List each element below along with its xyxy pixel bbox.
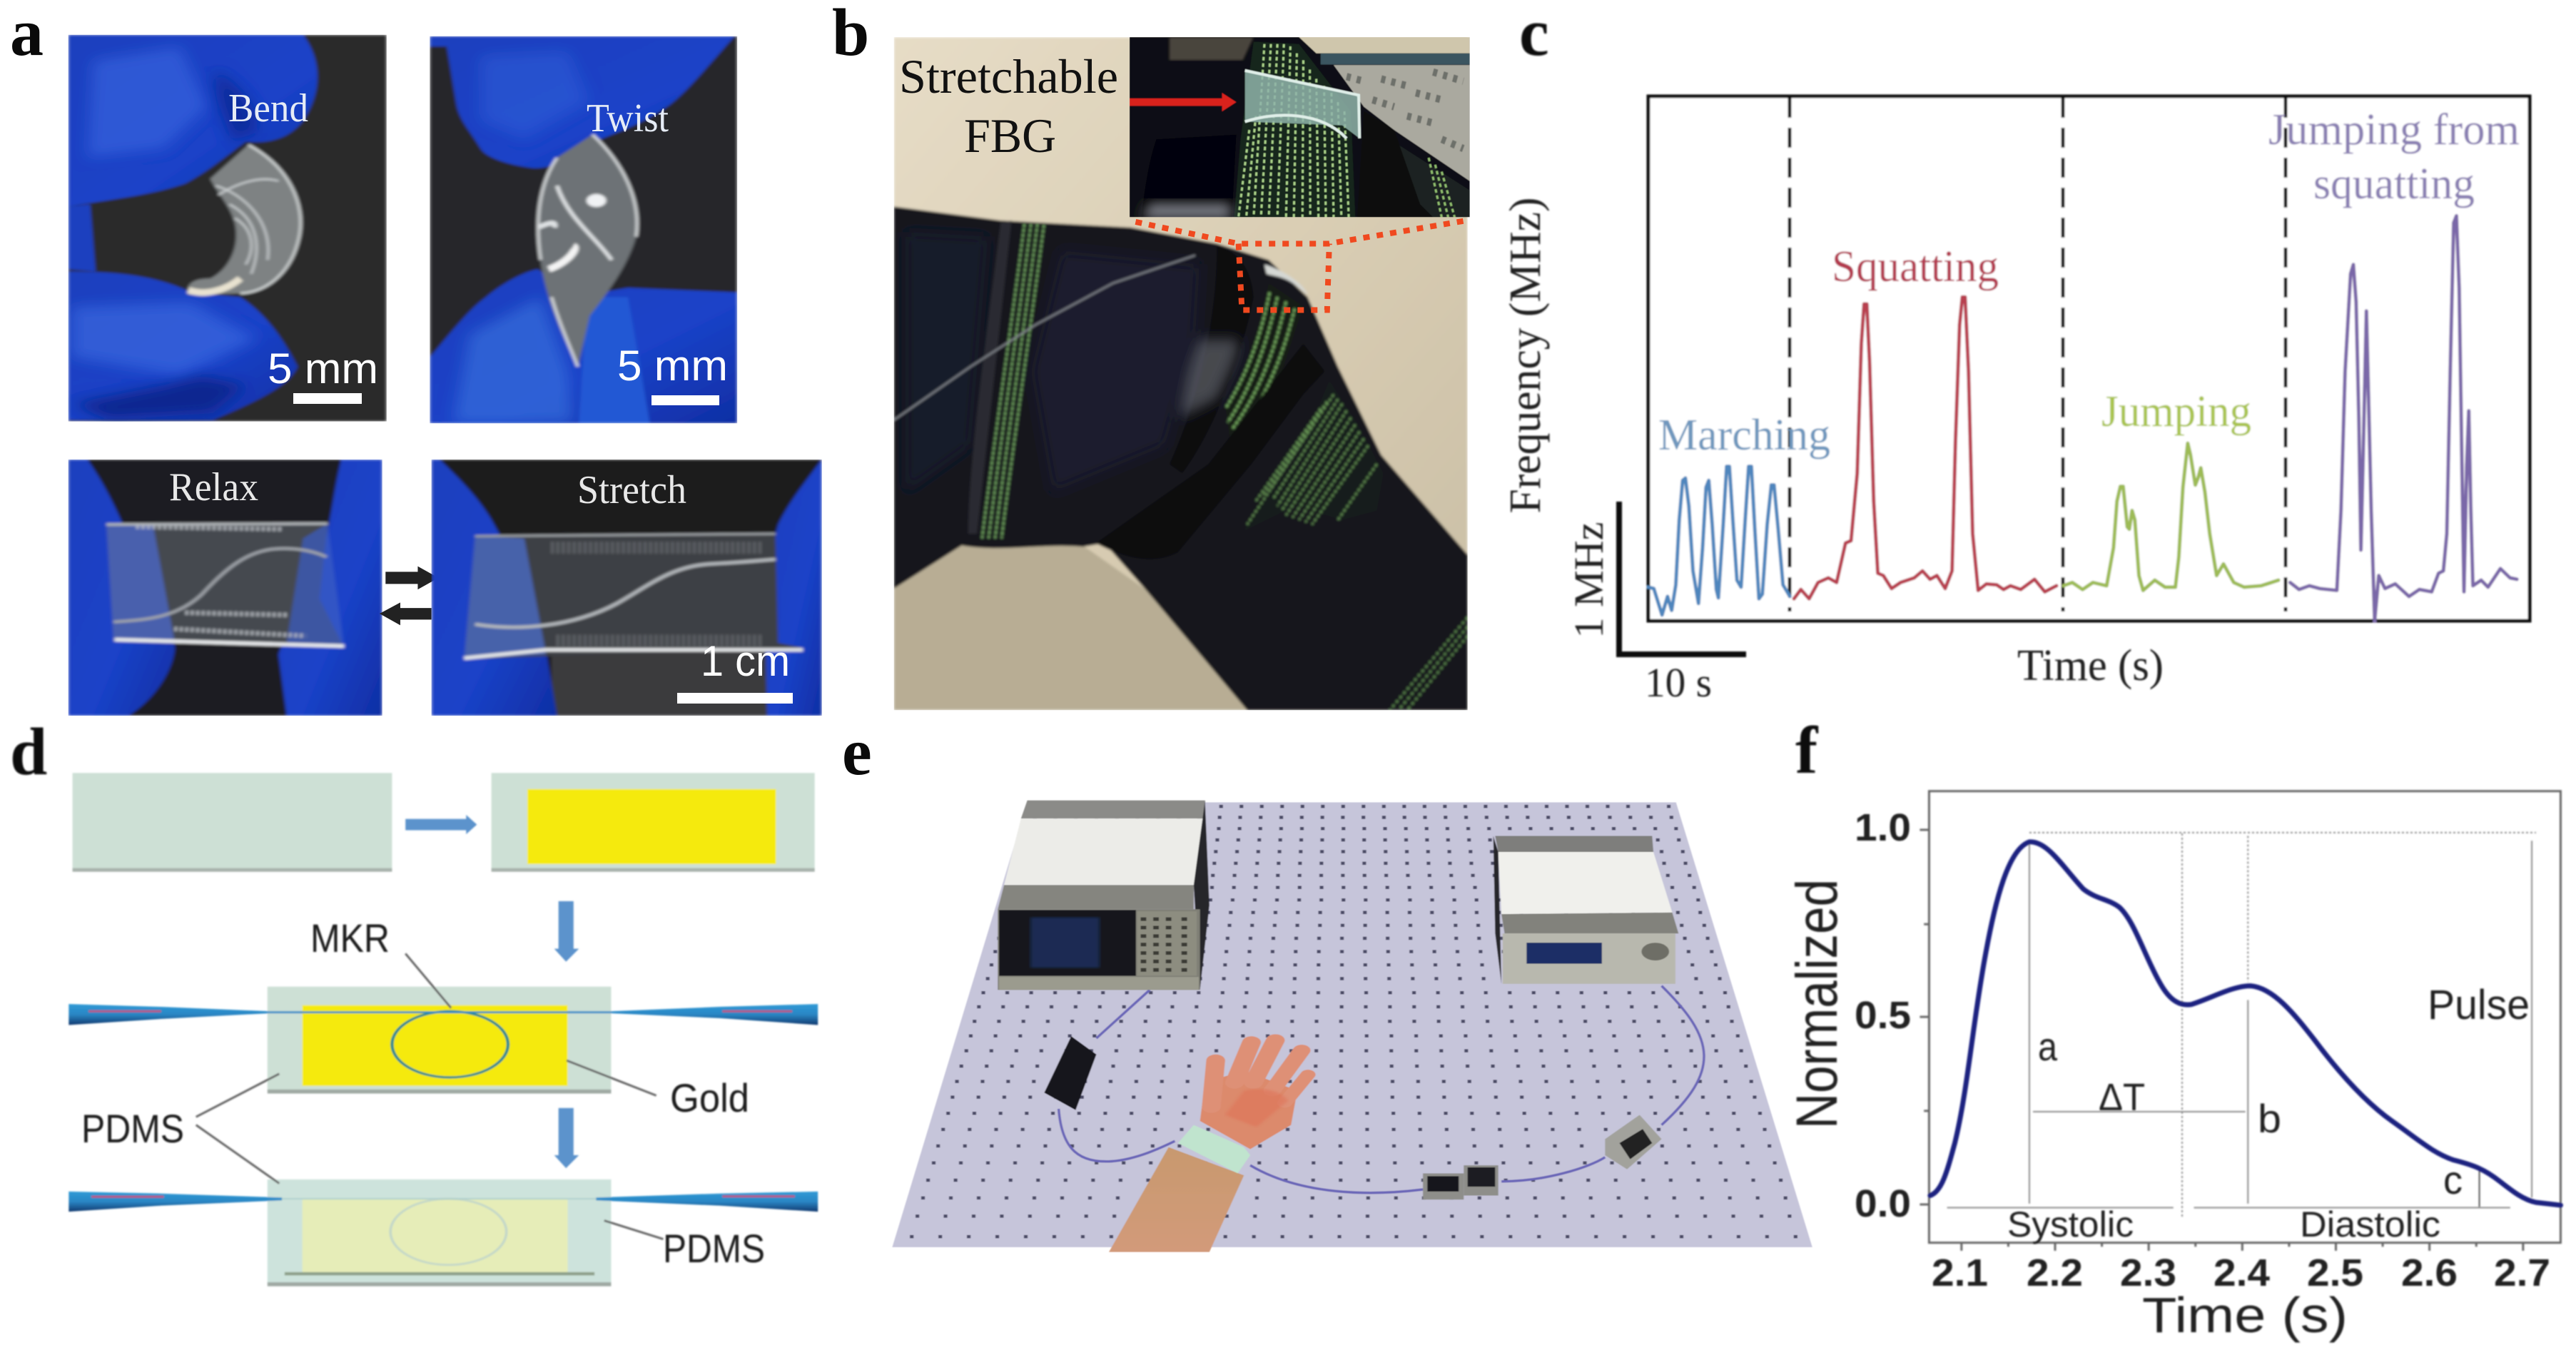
label: Jumping: Jumping xyxy=(2101,387,2251,436)
panel b: knee sleeve photo xyxy=(832,0,1470,710)
annotation: Systolic: Systolic xyxy=(2007,1204,2134,1244)
axis title: Time: Time (s) xyxy=(2142,1287,2348,1343)
panel d: fabrication schematic xyxy=(10,715,818,1287)
chart frame with ticks xyxy=(1920,791,2560,1251)
schematic drawing xyxy=(69,773,818,1287)
callout: red dotted zoom box xyxy=(1135,220,1467,310)
scale label: 5 mm: 5 mm xyxy=(617,342,728,390)
scale bar xyxy=(651,395,719,405)
icon: photodetector box xyxy=(1044,1036,1096,1110)
label: Twist: Twist xyxy=(587,96,669,141)
activity dividers xyxy=(1790,98,2286,612)
y tick labels: 0.5 xyxy=(1855,994,1911,1037)
panel c: frequency trace xyxy=(1501,0,2530,706)
x tick labels xyxy=(1932,1252,2550,1294)
arrow: step 1 to 2 xyxy=(405,815,477,834)
annotation: Pulse: Pulse xyxy=(2428,982,2530,1028)
optical breadboard xyxy=(892,803,1812,1247)
label: Stretch: Stretch xyxy=(577,468,686,512)
step 3: MKR on gold xyxy=(69,987,818,1094)
icon: arm with wristband xyxy=(1109,1040,1308,1252)
annotation: Diastolic: Diastolic xyxy=(2300,1204,2440,1244)
scale label: 10 s: 10 s xyxy=(1645,659,1712,706)
label: Relax: Relax xyxy=(169,465,258,509)
label: Jumping from squatting: Jumping from xyxy=(2268,106,2520,154)
panel label d: d xyxy=(10,715,47,789)
panel a: flexibility photos xyxy=(10,0,822,716)
annotation: b: b xyxy=(2258,1096,2281,1141)
label: Jumping from squatting: squatting xyxy=(2313,160,2475,208)
step 4: encapsulated device xyxy=(69,1179,818,1287)
leader lines xyxy=(196,953,663,1239)
annotation guides xyxy=(1947,833,2536,1218)
x tick labels: 2.7 xyxy=(2494,1252,2550,1294)
x tick labels: 2.5 xyxy=(2307,1252,2363,1294)
label: PDMS: PDMS xyxy=(81,1106,184,1151)
chart frame xyxy=(1648,96,2530,621)
arrow: step 3 to 4 xyxy=(554,1108,579,1168)
step 2: gold on PDMS xyxy=(492,773,815,872)
axis title: Normalized: Normalized xyxy=(1785,879,1850,1129)
x tick labels: 2.3 xyxy=(2120,1252,2176,1294)
step 1: PDMS substrate xyxy=(73,773,392,872)
pulse curve xyxy=(1930,842,2560,1205)
panel f: pulse waveform xyxy=(1785,714,2560,1343)
x tick labels: 2.6 xyxy=(2401,1252,2458,1294)
trace: jumping from squatting xyxy=(2290,215,2517,621)
label: Stretchable FBG xyxy=(899,49,1118,163)
label: Bend: Bend xyxy=(228,86,308,131)
x tick labels: 2.4 xyxy=(2214,1252,2270,1294)
y tick labels: 0.0 xyxy=(1855,1182,1911,1225)
annotation: delta T: ΔT xyxy=(2099,1076,2145,1119)
scale label: 1 cm: 1 cm xyxy=(701,637,790,685)
label: Squatting: Squatting xyxy=(1832,243,1999,291)
icon: inline optical mounts xyxy=(1423,1115,1662,1199)
photo: relax xyxy=(69,460,382,716)
inset: magnified sensor on sleeve xyxy=(1130,37,1470,218)
icon: signal generator xyxy=(1494,836,1678,984)
photo: knee with stretchable sensor xyxy=(894,37,1468,710)
fiber path xyxy=(1059,986,1704,1193)
x tick labels: 2.2 xyxy=(2027,1252,2083,1294)
traces by activity xyxy=(1648,215,2517,621)
label: Jumping from squatting xyxy=(2268,106,2520,208)
axis title: Frequency: Frequency (MHz) xyxy=(1501,197,1550,514)
label: Stretchable FBG: FBG xyxy=(964,108,1056,163)
photo: bend xyxy=(69,35,387,422)
label: PDMS top layer: PDMS xyxy=(663,1226,765,1271)
y tick labels: 1.0 xyxy=(1855,806,1911,849)
icon: oscilloscope xyxy=(998,801,1210,990)
label: Gold: Gold xyxy=(670,1075,749,1120)
trace: jumping xyxy=(2064,443,2278,590)
photo: twist xyxy=(430,36,737,423)
y tick labels xyxy=(1855,806,1911,1225)
scale bar xyxy=(677,693,793,704)
label: Stretchable FBG: Stretchable xyxy=(899,49,1118,103)
panel e: measurement setup photo xyxy=(842,715,1812,1252)
label: MKR: MKR xyxy=(310,915,390,960)
axis title: Time: Time (s) xyxy=(2017,641,2164,690)
arrow: step 2 to 3 xyxy=(554,901,579,962)
trace: marching xyxy=(1648,467,1790,615)
x tick labels: 2.1 xyxy=(1932,1252,1988,1294)
panel label f: f xyxy=(1795,714,1819,788)
annotation: c: c xyxy=(2443,1157,2463,1202)
chart drawing xyxy=(1920,791,2560,1251)
panel label e: e xyxy=(842,715,872,789)
label: Marching: Marching xyxy=(1658,411,1830,460)
photo: stretch xyxy=(432,460,822,716)
arrows: reversible stretch xyxy=(380,567,439,625)
scale bars xyxy=(1619,502,1746,654)
setup scene xyxy=(892,801,1812,1252)
scale bar xyxy=(293,393,362,404)
scale label: 5 mm: 5 mm xyxy=(268,345,378,392)
scale label: 1 MHz: 1 MHz xyxy=(1566,522,1612,638)
annotation: a: a xyxy=(2038,1024,2058,1069)
trace: squatting xyxy=(1794,297,2057,599)
